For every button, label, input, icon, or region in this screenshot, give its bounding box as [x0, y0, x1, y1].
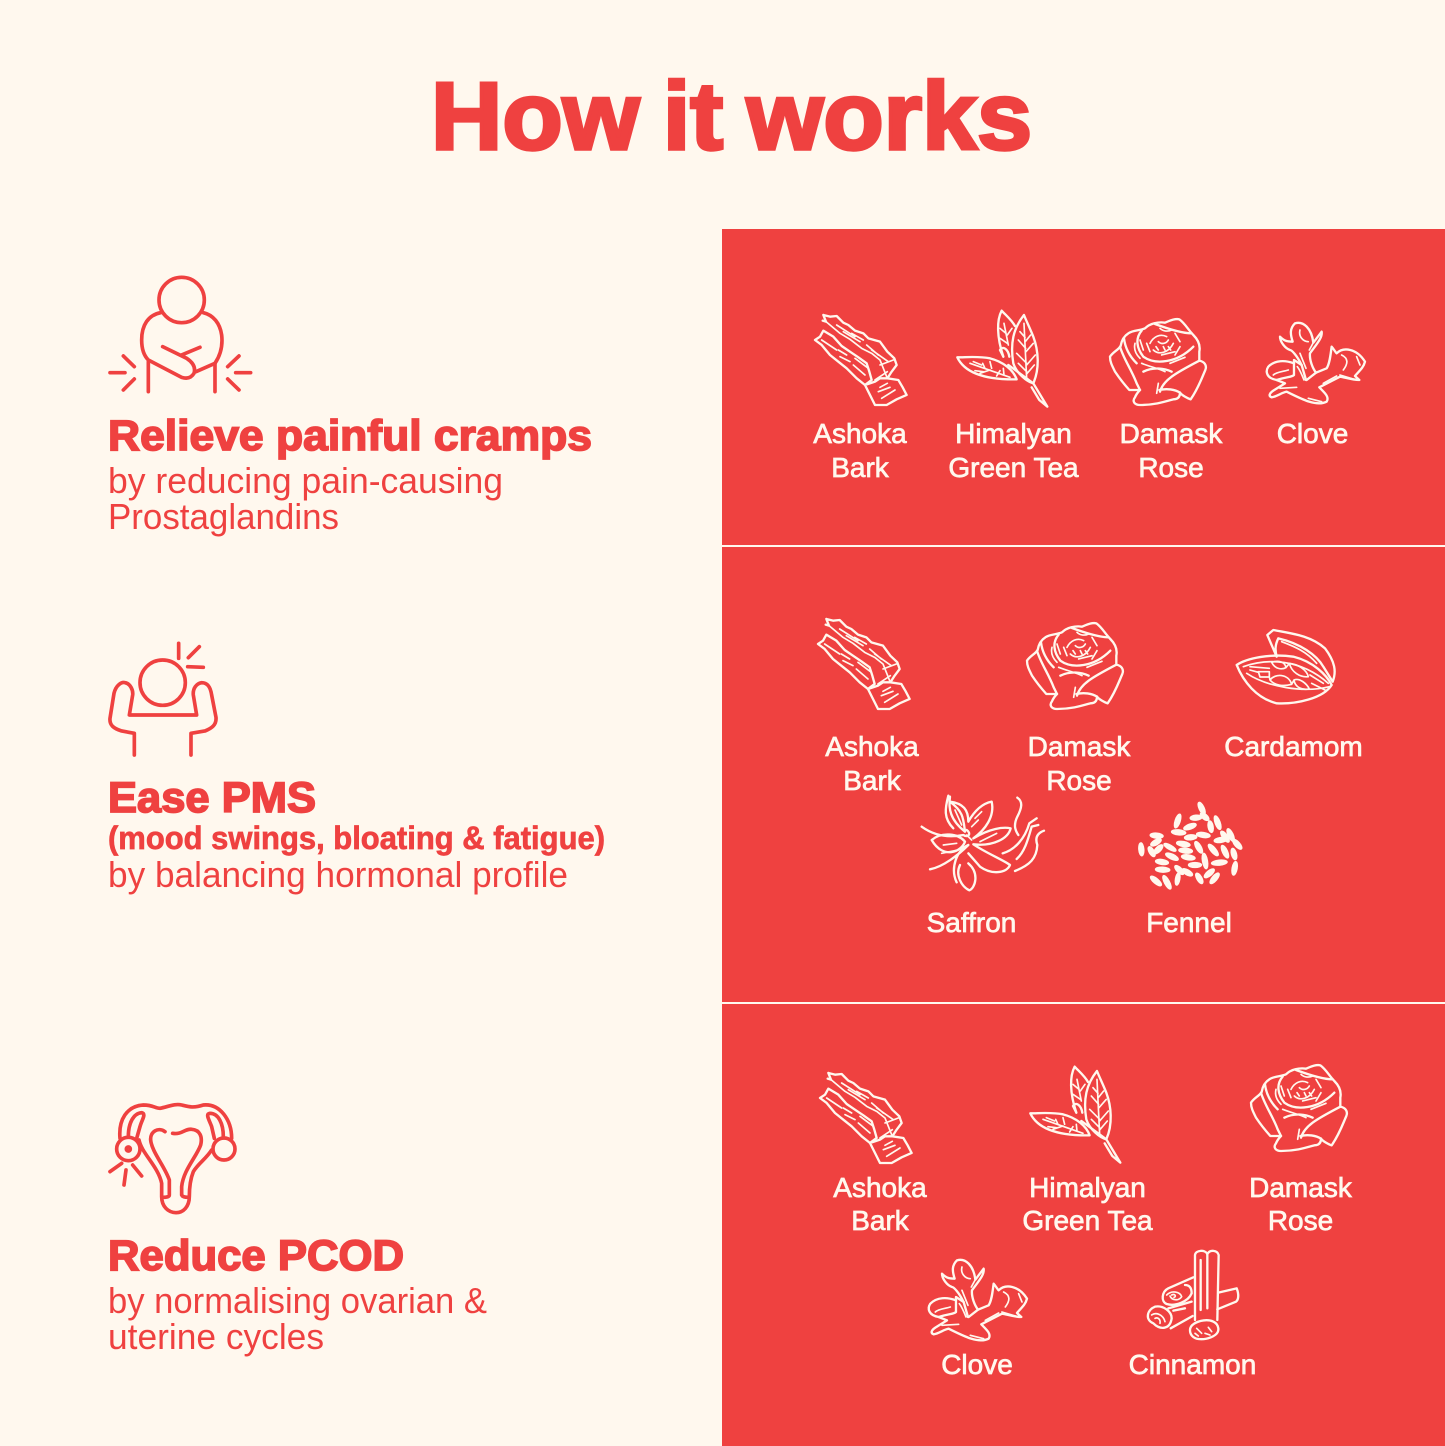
label: ashoka bark: Bark [831, 452, 890, 483]
icon: damask rose [1110, 319, 1206, 405]
heading: relieve cramps: Relieve painful cramps [108, 412, 592, 460]
heading: reduce pcod: Reduce PCOD [108, 1232, 404, 1280]
icon: ashoka bark [818, 619, 910, 709]
text: cramps description: Prostaglandins [108, 496, 339, 537]
text: pcod description: by normalising ovarian & [108, 1280, 487, 1321]
panel: pms ingredients [722, 547, 1445, 1002]
label: clove: Clove [941, 1349, 1013, 1380]
label: clove: Clove [1277, 418, 1348, 449]
icon: clove [929, 1260, 1027, 1340]
title: How it works [431, 63, 1032, 170]
label: ashoka bark: Ashoka [813, 418, 907, 449]
panel: pcod ingredients [722, 1004, 1445, 1446]
label: cardamom: Cardamom [1224, 731, 1363, 762]
icon: person holding stomach [110, 277, 251, 392]
label: himalyan green tea: Himalyan [1029, 1172, 1146, 1203]
icon: himalyan green tea [957, 311, 1047, 407]
icon: fennel [1138, 801, 1244, 890]
icon: himalyan green tea [1030, 1067, 1120, 1163]
icon: ashoka bark [815, 315, 907, 405]
text: pms symptoms: (mood swings, bloating & fatigue) [108, 820, 605, 856]
label: himalyan green tea: Green Tea [1022, 1205, 1153, 1236]
label: damask rose: Rose [1138, 452, 1204, 483]
icon: cinnamon [1148, 1251, 1238, 1339]
icon: uterus and ovaries [110, 1105, 235, 1213]
label: damask rose: Damask [1028, 731, 1130, 762]
label: ashoka bark: Ashoka [825, 731, 919, 762]
icon: damask rose [1027, 623, 1123, 709]
label: ashoka bark: Bark [851, 1205, 910, 1236]
label: himalyan green tea: Green Tea [948, 452, 1079, 483]
panel: cramps ingredients [722, 229, 1445, 545]
label: fennel: Fennel [1146, 907, 1232, 938]
icon: saffron [922, 796, 1044, 890]
text: pcod description: uterine cycles [108, 1316, 324, 1357]
icon: cardamom [1237, 630, 1335, 703]
heading: ease pms: Ease PMS [108, 774, 316, 822]
icon: clove [1267, 323, 1365, 403]
label: ashoka bark: Ashoka [833, 1172, 927, 1203]
label: saffron: Saffron [927, 907, 1016, 938]
label: damask rose: Rose [1268, 1205, 1333, 1236]
label: cinnamon: Cinnamon [1129, 1349, 1256, 1380]
icon: ashoka bark [820, 1073, 912, 1163]
icon: person with headache [110, 643, 216, 755]
label: ashoka bark: Bark [843, 765, 902, 796]
icon: damask rose [1251, 1065, 1347, 1151]
label: damask rose: Rose [1046, 765, 1112, 796]
label: himalyan green tea: Himalyan [955, 418, 1072, 449]
text: pms description: by balancing hormonal profile [108, 854, 568, 895]
label: damask rose: Damask [1120, 418, 1222, 449]
text: cramps description: by reducing pain-causing [108, 460, 503, 501]
label: damask rose: Damask [1249, 1172, 1352, 1203]
